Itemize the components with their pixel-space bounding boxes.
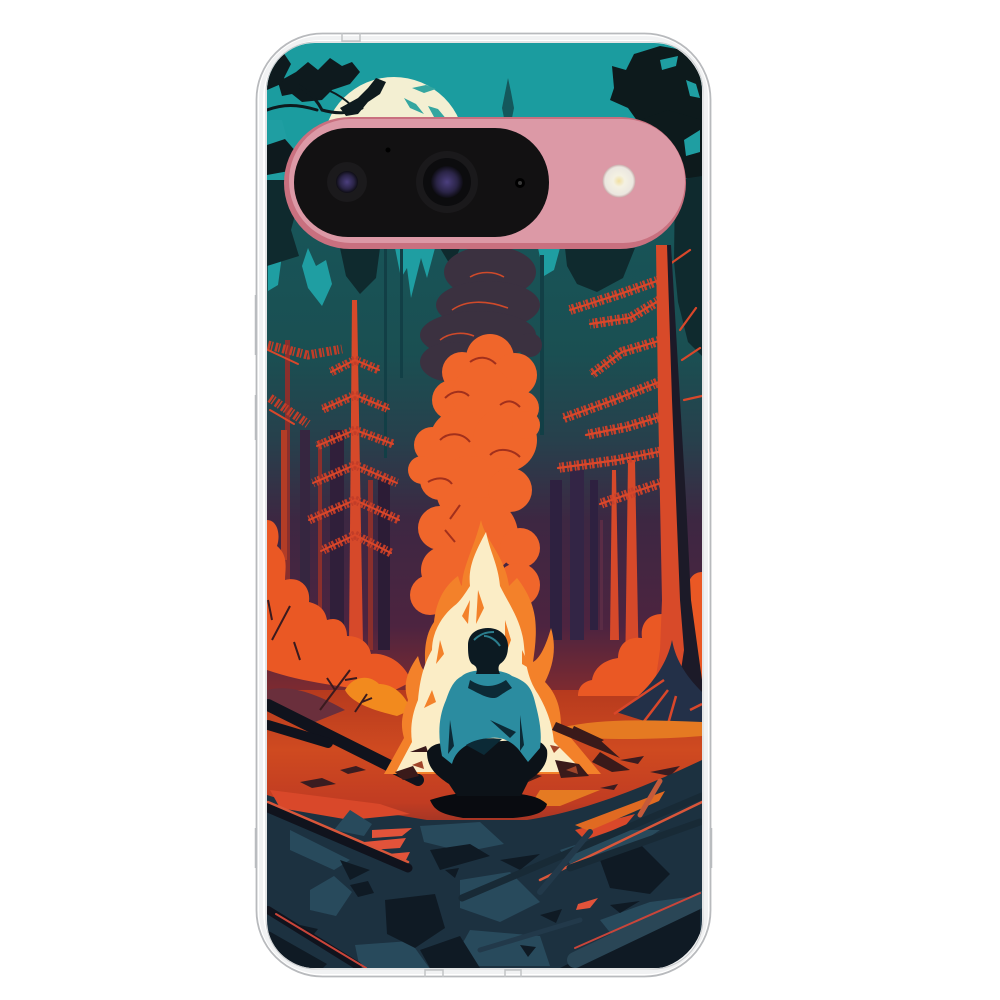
orange bush right: [578, 572, 704, 696]
big right trunk: shadow side: [667, 245, 702, 692]
printed artwork: [267, 43, 705, 974]
distant teal forest: [267, 218, 702, 690]
black foliage top right: [610, 46, 702, 182]
bare branches left: [268, 600, 372, 712]
flame core: [396, 532, 584, 772]
sensor: [515, 178, 525, 188]
right foliage teal gaps: [660, 56, 700, 156]
wide lens: [327, 162, 367, 202]
trunk root flare: [616, 640, 702, 726]
ground debris chips: [300, 756, 680, 790]
man: seated figure: [427, 628, 547, 818]
side buttons: [256, 295, 711, 868]
moon: [328, 77, 458, 121]
purple mound left: [267, 688, 345, 722]
rock facets: [290, 810, 696, 969]
hoodie: [439, 670, 541, 764]
legs: [430, 793, 547, 818]
right pine needles: [558, 280, 670, 504]
black rocks: [267, 844, 700, 974]
smoke column: [420, 246, 542, 382]
black foliage top left: [267, 52, 386, 175]
dark rocks ground: [267, 760, 702, 968]
right pine branches: [558, 250, 702, 504]
roots orange lines: [614, 680, 702, 724]
ember pile: [395, 722, 630, 782]
light sky gaps between trees: [268, 248, 560, 306]
fallen logs: [268, 705, 705, 968]
orange bush left: [267, 520, 411, 694]
mid trunks: [281, 300, 638, 642]
dark foliage below camera: [267, 176, 702, 356]
forest floor: [267, 690, 702, 820]
smoke highlight: [440, 272, 508, 340]
sky: [267, 43, 702, 180]
amber floor glow: [530, 720, 702, 806]
amber bush highlight: [345, 678, 411, 716]
background trunks: [285, 248, 603, 650]
main lens: [416, 151, 478, 213]
clear case shell: [256, 33, 711, 977]
flame licks: [424, 590, 532, 708]
flames: [384, 520, 601, 774]
left pine branches: [268, 350, 399, 553]
hoodie shadows: [448, 680, 524, 755]
head: [468, 628, 508, 674]
camera window: [294, 128, 549, 237]
fire cloud: [408, 334, 540, 615]
hair strands: [474, 632, 500, 646]
knees and lower jacket: [427, 739, 547, 796]
orange floor patches: [270, 790, 665, 910]
microphone hole: [386, 148, 390, 152]
flash: [602, 164, 636, 198]
camera bar: [284, 117, 686, 249]
distant pine tip: [502, 78, 514, 118]
fire cloud shading: [428, 358, 520, 542]
big right trunk: orange side: [654, 245, 684, 690]
left pine needles: [268, 345, 399, 553]
black tree branches top left: [267, 78, 362, 113]
phone case product illustration: [254, 32, 712, 978]
